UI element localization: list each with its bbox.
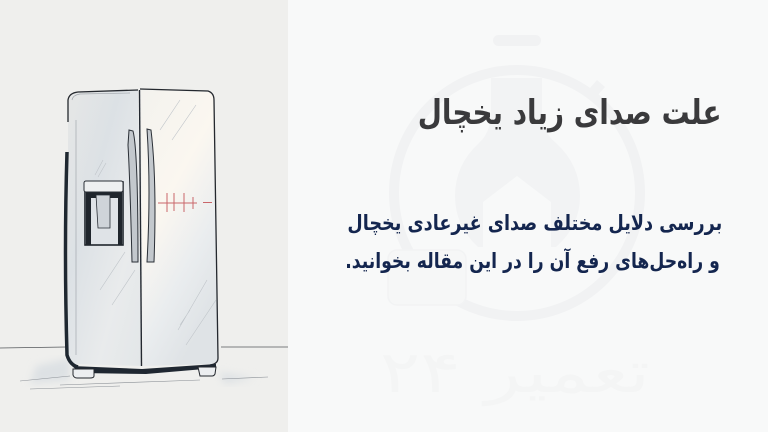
description line 1: بررسی دلایل مختلف صدای غیرعادی یخچال (347, 211, 722, 235)
left door (68, 90, 142, 366)
panel background (0, 0, 288, 432)
base (72, 364, 216, 374)
right door (141, 90, 218, 366)
description text (345, 211, 722, 273)
outline (68, 89, 218, 365)
panel: fridge illustration (0, 0, 288, 432)
floor (0, 347, 288, 389)
right handle (147, 129, 155, 262)
watermark: brand name: تعمیر ۲۴ (380, 339, 650, 407)
sound wave (158, 193, 212, 212)
description line 2: و راه‌حل‌های رفع آن را در این مقاله بخوانید. (345, 249, 720, 273)
left handle (128, 130, 138, 262)
title: علت صدای زیاد یخچال (418, 93, 722, 133)
water dispenser (84, 181, 123, 245)
watermark: stopwatch ring with wrench and house (388, 35, 640, 316)
right foot (198, 367, 216, 376)
left foot (73, 369, 94, 378)
refrigerator (66, 89, 218, 378)
highlights (95, 100, 216, 345)
